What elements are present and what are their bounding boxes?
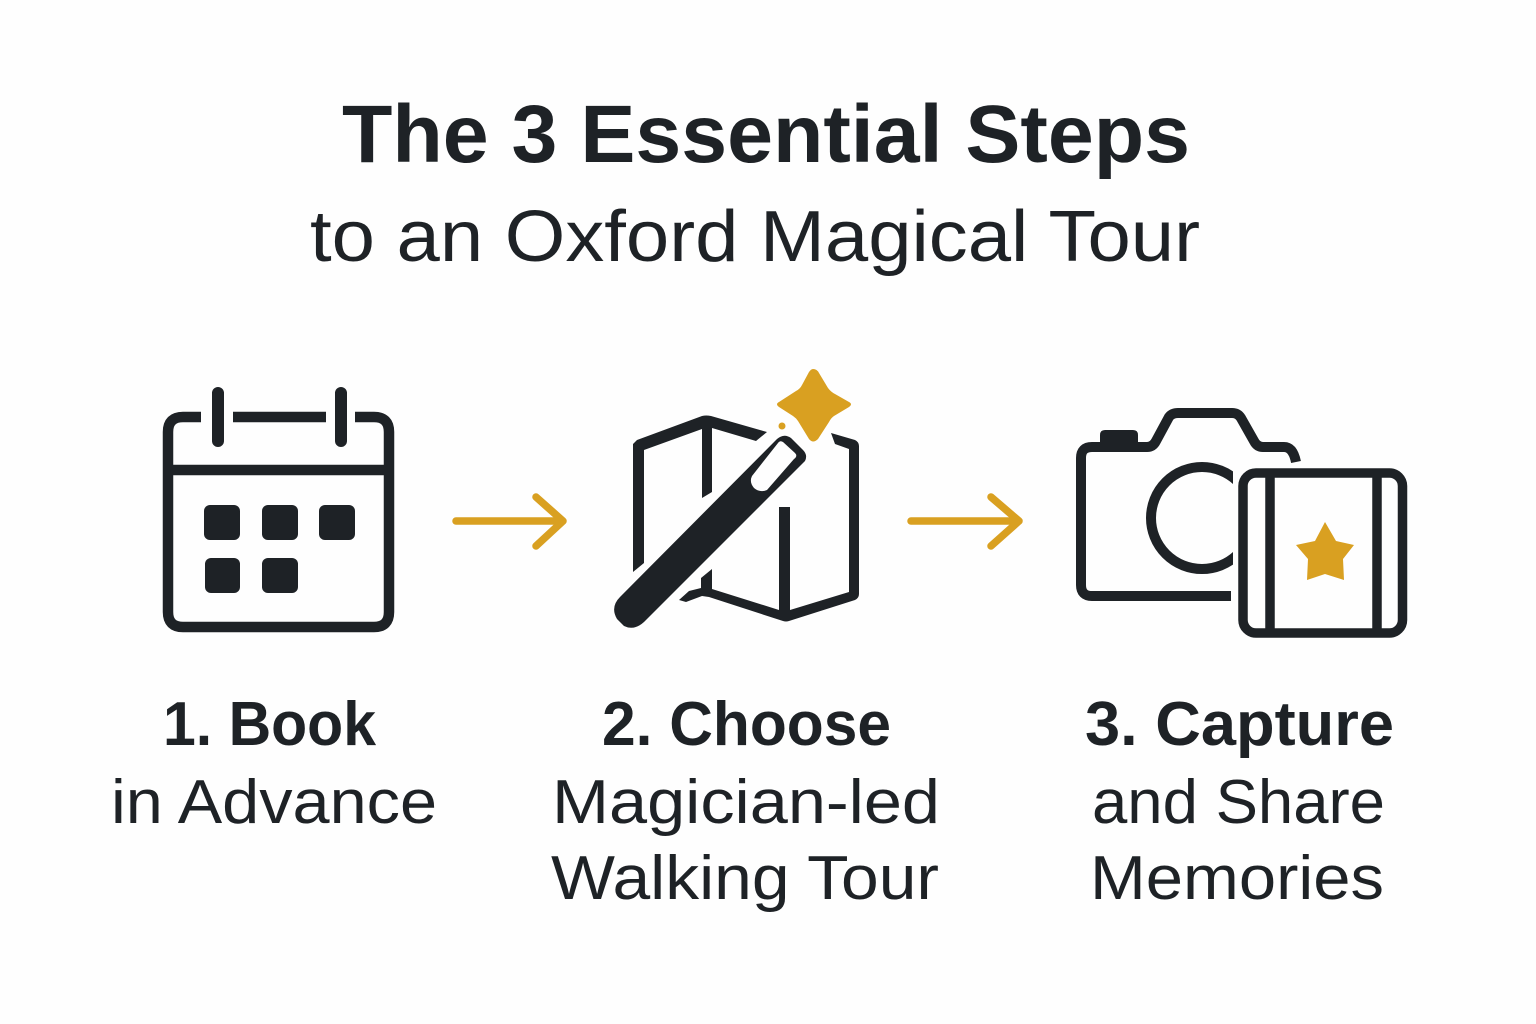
label: step 2: Walking Tour	[551, 844, 939, 913]
label: step 3	[1085, 690, 1394, 913]
label: step 1: in Advance	[111, 768, 437, 837]
album star	[1296, 522, 1354, 580]
label: step 1	[111, 690, 437, 837]
label: step 2: 2. Choose	[602, 690, 891, 759]
label: step 1: 1. Book	[163, 690, 376, 759]
arrow: step 2 to step 3	[911, 497, 1019, 546]
album	[1243, 473, 1402, 633]
arrow: step 1 to step 2	[456, 497, 563, 546]
label: step 3: 3. Capture	[1085, 690, 1394, 759]
camera body	[1081, 413, 1296, 596]
icon: map with magic wand	[614, 369, 859, 628]
heading: main title: The 3 Essential Steps	[342, 89, 1190, 180]
sparkle	[777, 369, 851, 442]
sparkle dot	[778, 422, 786, 430]
title	[310, 89, 1200, 277]
label: step 3: and Share	[1092, 768, 1385, 837]
camera lens	[1151, 467, 1253, 569]
magic wand	[614, 436, 806, 628]
label: step 2: Magician-led	[552, 768, 940, 837]
map outline	[633, 416, 859, 622]
label: step 2	[551, 690, 940, 913]
icon: camera and photo album	[1081, 413, 1402, 633]
icon: calendar	[168, 393, 389, 627]
heading: subtitle: to an Oxford Magical Tour	[310, 197, 1200, 277]
camera button	[1100, 430, 1138, 447]
label: step 3: Memories	[1090, 844, 1384, 913]
